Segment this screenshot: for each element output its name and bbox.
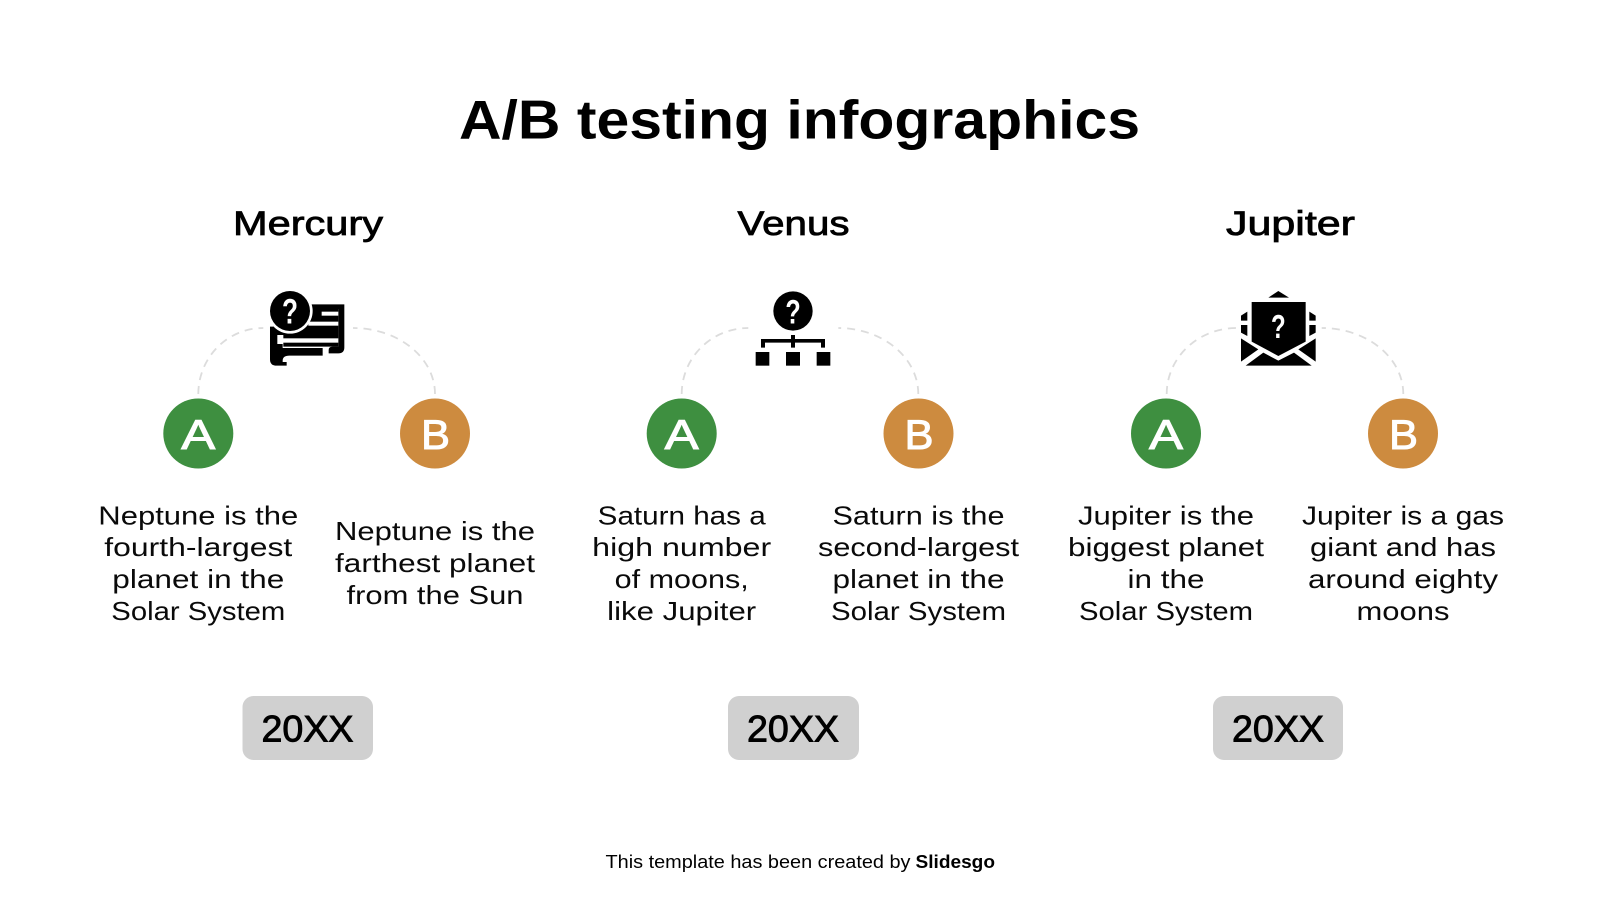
- text block B: planet in the: [832, 564, 1004, 594]
- heading: Venus: Venus: [738, 205, 850, 243]
- text block A: Saturn has a: [598, 500, 766, 530]
- badge A: [1131, 398, 1201, 468]
- badge A: A: [665, 411, 699, 458]
- text block A: of moons,: [615, 564, 749, 594]
- heading: Mercury: Mercury: [233, 205, 384, 243]
- text block A: biggest planet: [1068, 532, 1265, 562]
- text block B: Solar System: [831, 596, 1006, 626]
- text block A: [592, 500, 772, 626]
- panel: Venus: [592, 205, 1020, 760]
- badge A: [163, 398, 233, 468]
- date pill: 20XX: [1232, 708, 1324, 750]
- text block A: high number: [592, 532, 772, 562]
- badge A: A: [181, 411, 215, 458]
- heading: Jupiter: Jupiter: [1226, 205, 1355, 243]
- badge B: B: [1389, 411, 1418, 458]
- icon: question document: ?: [282, 292, 298, 331]
- connector: A arc: [198, 328, 263, 394]
- badge B: [400, 398, 470, 468]
- footer credit: This template has been created by: [606, 851, 911, 872]
- text block B: second-largest: [818, 532, 1020, 562]
- badge B: B: [421, 411, 450, 458]
- date pill: [728, 696, 859, 760]
- text block A: Solar System: [111, 596, 285, 626]
- icon: question document: [267, 288, 344, 366]
- text block B: giant and has: [1310, 532, 1496, 562]
- panel: Jupiter: [1068, 205, 1504, 760]
- text block A: Solar System: [1079, 596, 1253, 626]
- title: A/B testing infographics: [459, 88, 1140, 150]
- badge A: A: [1149, 411, 1183, 458]
- badge B: [884, 398, 954, 468]
- text block B: around eighty: [1308, 564, 1498, 594]
- text block A: fourth-largest: [104, 532, 293, 562]
- footer credit: Slidesgo: [916, 851, 995, 872]
- text block A: Jupiter is the: [1078, 500, 1254, 530]
- text block A: in the: [1128, 564, 1204, 594]
- text block A: [1068, 500, 1265, 626]
- text block A: [98, 500, 298, 626]
- text block B: farthest planet: [335, 548, 536, 578]
- badge B: B: [904, 411, 934, 458]
- icon: question hierarchy: ?: [785, 293, 801, 331]
- panel: Mercury: [98, 205, 536, 760]
- connector: A arc: [1167, 328, 1237, 394]
- badge A: [647, 398, 717, 468]
- date pill: [242, 696, 373, 760]
- text block A: like Jupiter: [607, 596, 757, 626]
- text block A: Neptune is the: [98, 500, 298, 530]
- date pill: 20XX: [262, 708, 354, 750]
- text block B: Neptune is the: [335, 516, 535, 546]
- text block B: [818, 500, 1020, 626]
- icon: question envelope: [1241, 291, 1316, 366]
- connector: B arc: [1322, 328, 1403, 394]
- text block A: planet in the: [112, 564, 284, 594]
- text block B: moons: [1356, 596, 1450, 626]
- text block B: [335, 516, 536, 610]
- connector: B arc: [353, 328, 435, 394]
- text block B: Saturn is the: [832, 500, 1004, 530]
- badge B: [1368, 398, 1438, 468]
- date pill: 20XX: [747, 708, 839, 750]
- connector: B arc: [838, 328, 918, 394]
- text block B: Jupiter is a gas: [1302, 500, 1504, 530]
- connector: A arc: [682, 328, 748, 394]
- text block B: [1302, 500, 1504, 626]
- icon: question envelope: ?: [1271, 309, 1286, 346]
- text block B: from the Sun: [346, 580, 524, 610]
- date pill: [1213, 696, 1343, 760]
- icon: question hierarchy: [756, 291, 830, 366]
